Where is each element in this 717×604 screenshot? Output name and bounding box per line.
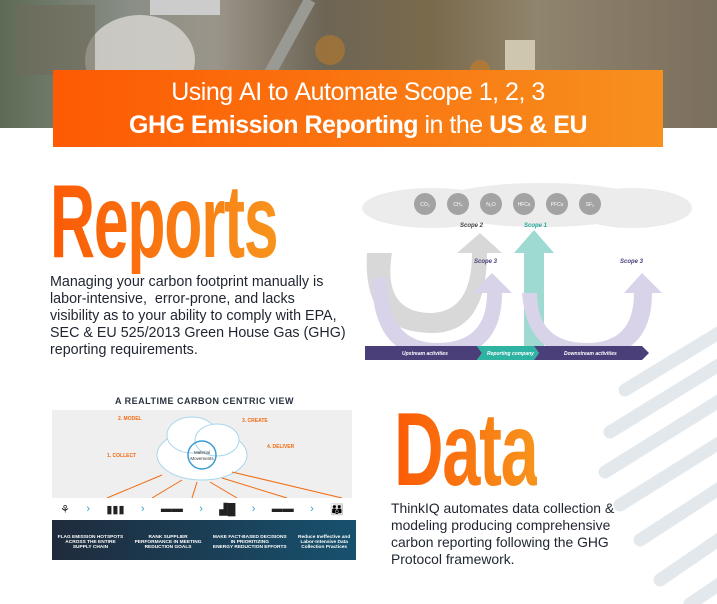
diagram: realtime carbon centric view: Movements <box>190 456 214 461</box>
text: reports description: visibility as to your ability to comply with EPA, <box>50 308 337 324</box>
benefits bar: MAKE FACT-BASED DECISIONS <box>213 534 287 540</box>
diagram: GHG scopes: N₂O <box>486 202 496 208</box>
diagram title: A REALTIME CARBON CENTRIC VIEW <box>115 396 294 406</box>
scope 2 arrow <box>367 233 502 333</box>
benefits bar: RANK SUPPLIER <box>148 534 188 540</box>
icons row: ▬▬ <box>272 503 294 515</box>
text: data description: modeling producing comprehensive <box>391 517 610 533</box>
diagram: realtime carbon centric view: 2. MODEL <box>118 416 142 422</box>
text: data description: Protocol framework. <box>391 551 515 567</box>
scope 3 upstream <box>372 273 512 358</box>
diagram: realtime carbon centric view: 4. DELIVER <box>267 444 295 450</box>
benefits bar: SUPPLY CHAIN <box>73 544 108 550</box>
diagram: realtime carbon centric view <box>52 396 356 560</box>
diagram: GHG scopes: PFCs <box>551 202 564 208</box>
icons row: ⚘ <box>60 504 70 516</box>
title banner <box>53 70 663 147</box>
benefits bar: REDUCTION GOALS <box>145 544 192 550</box>
benefits bar: PERFORMANCE IN MEETING <box>135 540 202 544</box>
text: data description: carbon reporting following the GHG <box>391 534 609 550</box>
benefits bar <box>52 520 356 560</box>
diagram: GHG scopes: Scope 3 <box>620 259 644 265</box>
scope 3 downstream <box>522 273 662 358</box>
diagram: GHG scopes <box>362 183 692 360</box>
clouds <box>362 183 692 228</box>
icons row: › <box>141 503 145 515</box>
benefits bar: FLAG EMISSION HOTSPOTS <box>58 534 123 540</box>
text: reports description <box>50 274 346 358</box>
benefits bar: ENERGY REDUCTION EFFORTS <box>213 544 287 550</box>
heading: Data: Data <box>394 392 537 508</box>
icons row: › <box>310 503 314 515</box>
diagram: realtime carbon centric view: 3. CREATE <box>242 418 268 424</box>
diagram: GHG scopes: Scope 1 <box>524 223 548 229</box>
title banner: GHG Emission Reporting in the US & EU <box>129 111 587 139</box>
icons row: ▟█ <box>219 504 235 516</box>
icons row: ▮▮▮ <box>106 504 125 516</box>
diagram: GHG scopes: Scope 3 <box>474 259 498 265</box>
benefits bar: Labor-Intensive Data <box>300 540 348 544</box>
icons row: › <box>252 503 255 515</box>
text: reports description: SEC & EU 525/2013 Green House Gas (GHG) <box>50 325 346 341</box>
benefits bar: Collection Practices <box>301 544 347 550</box>
diagram: GHG scopes: CH₄ <box>453 202 463 208</box>
header photo <box>0 0 717 128</box>
benefits bar: ACROSS THE ENTIRE <box>65 540 116 544</box>
text: data description: ThinkIQ automates data collection & <box>391 500 614 516</box>
benefits bar: IN PRIORITIZING <box>231 540 269 544</box>
scope 1 <box>514 230 554 348</box>
text: reports description: Managing your carbon footprint manually is <box>50 274 323 290</box>
diagram: realtime carbon centric view: Material <box>194 450 210 455</box>
gas circles <box>414 193 601 215</box>
icons row: ▬▬ <box>161 503 183 515</box>
benefits bar: Reduce Ineffective and <box>298 534 350 540</box>
diagram: GHG scopes: CO₂ <box>420 202 430 208</box>
diagram: GHG scopes: Scope 2 <box>460 223 484 229</box>
diagram: GHG scopes: SF₆ <box>586 202 594 208</box>
bottom bar <box>365 346 482 360</box>
text: reports description: labor-intensive, error-prone, and lacks <box>50 291 295 307</box>
text: data description <box>391 500 614 567</box>
title banner: Using AI to Automate Scope 1, 2, 3 <box>171 78 545 106</box>
diagram: realtime carbon centric view: 1. COLLECT <box>107 453 136 459</box>
text: reports description: reporting requirements. <box>50 342 198 358</box>
icons row <box>60 502 344 516</box>
diagram: GHG scopes: Reporting company <box>487 351 534 357</box>
heading: Reports: Reports <box>50 164 277 280</box>
icons row: 👪 <box>330 504 344 516</box>
icons row: › <box>199 503 203 515</box>
diagram: GHG scopes: HFCs <box>518 202 531 208</box>
diagram: GHG scopes: Upstream activities <box>402 351 448 357</box>
diagram: GHG scopes: Downstream activities <box>564 351 617 357</box>
icons row: › <box>86 503 90 515</box>
